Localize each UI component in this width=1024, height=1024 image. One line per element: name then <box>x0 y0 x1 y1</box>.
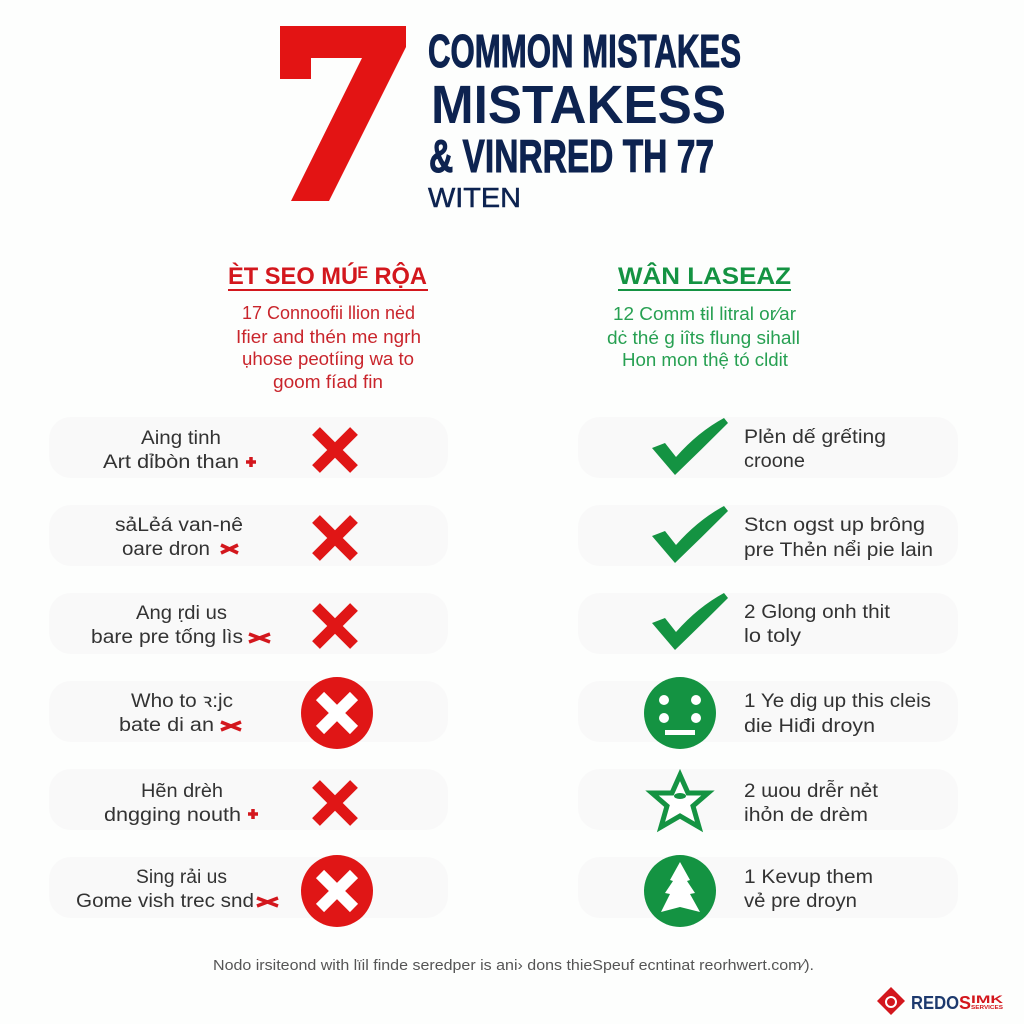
big red number 7 <box>280 26 406 201</box>
intro text: mistakes column: 17 Connoofii llion nėd <box>242 303 415 323</box>
mistake row 6: Gome vish trec snd <box>76 891 254 912</box>
mistake row 1 <box>49 417 448 478</box>
fix row 1: croone <box>744 451 805 472</box>
mistake row 4: bate di an <box>119 715 214 736</box>
mistake row 1: Aing tinh <box>141 428 221 449</box>
fix row 6 <box>578 855 958 927</box>
intro text: fixes column: 12 Comm ŧil litral or⁄ar <box>613 304 796 324</box>
mistake row 6: Sing rải us <box>136 867 227 888</box>
fix row 2: Stcn ogst up brông <box>744 515 925 536</box>
mistake row 3: bare pre tống lìs <box>91 627 243 648</box>
fix row 5 <box>578 769 958 830</box>
mistake row 5 <box>49 769 448 830</box>
mistake row 4 <box>49 677 448 749</box>
mistake row 2 <box>49 505 448 566</box>
intro text: mistakes column: goom fíad fin <box>273 372 383 392</box>
mistake row 2: oare dron <box>122 539 210 560</box>
mistake row 3: Ang ṛdi us <box>136 603 227 624</box>
mistake row 4: Who to ꝛ:jc <box>131 691 233 712</box>
mistake row 1: Art dỉbòn than <box>103 452 239 473</box>
logo: IMK <box>971 994 1003 1006</box>
fix row 1: Plẻn dế grếting <box>744 427 886 448</box>
fix row 4: 1 Ye dig up this cleis <box>744 691 931 712</box>
intro text: mistakes column: Ifier and thén me ngrh <box>236 327 421 347</box>
fix row 6: vẻ pre droyn <box>744 891 857 912</box>
logo <box>877 987 1004 1015</box>
title block: & VINRRED TH 77 <box>429 130 714 182</box>
fix row 1 <box>578 417 958 478</box>
intro text: fixes column: dċ thé g iîts flung sihall <box>607 328 800 348</box>
fix row 2: pre Thẻn nểi pie lain <box>744 540 933 561</box>
intro text: mistakes column <box>236 303 421 392</box>
fix row 3 <box>578 593 958 654</box>
panel heading: fixes column: WÂN LASEAZ <box>618 262 791 290</box>
logo: S <box>959 993 971 1013</box>
fix row 5: ihỏn de drèm <box>744 805 868 826</box>
intro text: fixes column <box>607 304 800 370</box>
logo: REDO <box>911 993 959 1013</box>
fix row 4 <box>578 677 958 749</box>
mistake row 2: sảLẻá van-nê <box>115 515 243 536</box>
mistake row 6 <box>49 855 448 927</box>
title block: WITEN <box>428 182 521 213</box>
fix row 3: 2 Glong onh thit <box>744 602 891 623</box>
title block <box>428 25 741 213</box>
intro text: mistakes column: ụhose peotíing wa to <box>242 349 414 369</box>
fix row 6: 1 Kevup them <box>744 867 873 888</box>
fix row 4: die Hiđi droyn <box>744 716 875 737</box>
title block: COMMON MISTAKES <box>428 25 741 77</box>
footer note: Nodo irsiteond with lïil finde seredper is ani› dons thieSpeuf ecntinat reorhwert.com⁄). <box>213 957 814 974</box>
panel heading: mistakes column: ÈT SEO MÚᴱ RỘA <box>228 262 427 290</box>
title block: MISTAKESS <box>431 75 726 135</box>
fix row 5: 2 ɯou drễr nẻt <box>744 780 879 802</box>
logo: SERVICES <box>971 1005 1004 1011</box>
fix row 3: lo toly <box>744 626 802 647</box>
mistake row 5: dngging nouth <box>104 805 241 826</box>
mistake row 3 <box>49 593 448 654</box>
fix row 2 <box>578 505 958 566</box>
intro text: fixes column: Hon mon thệ tó cldit <box>622 350 788 370</box>
mistake row 5: Hẽn drèh <box>141 781 223 802</box>
